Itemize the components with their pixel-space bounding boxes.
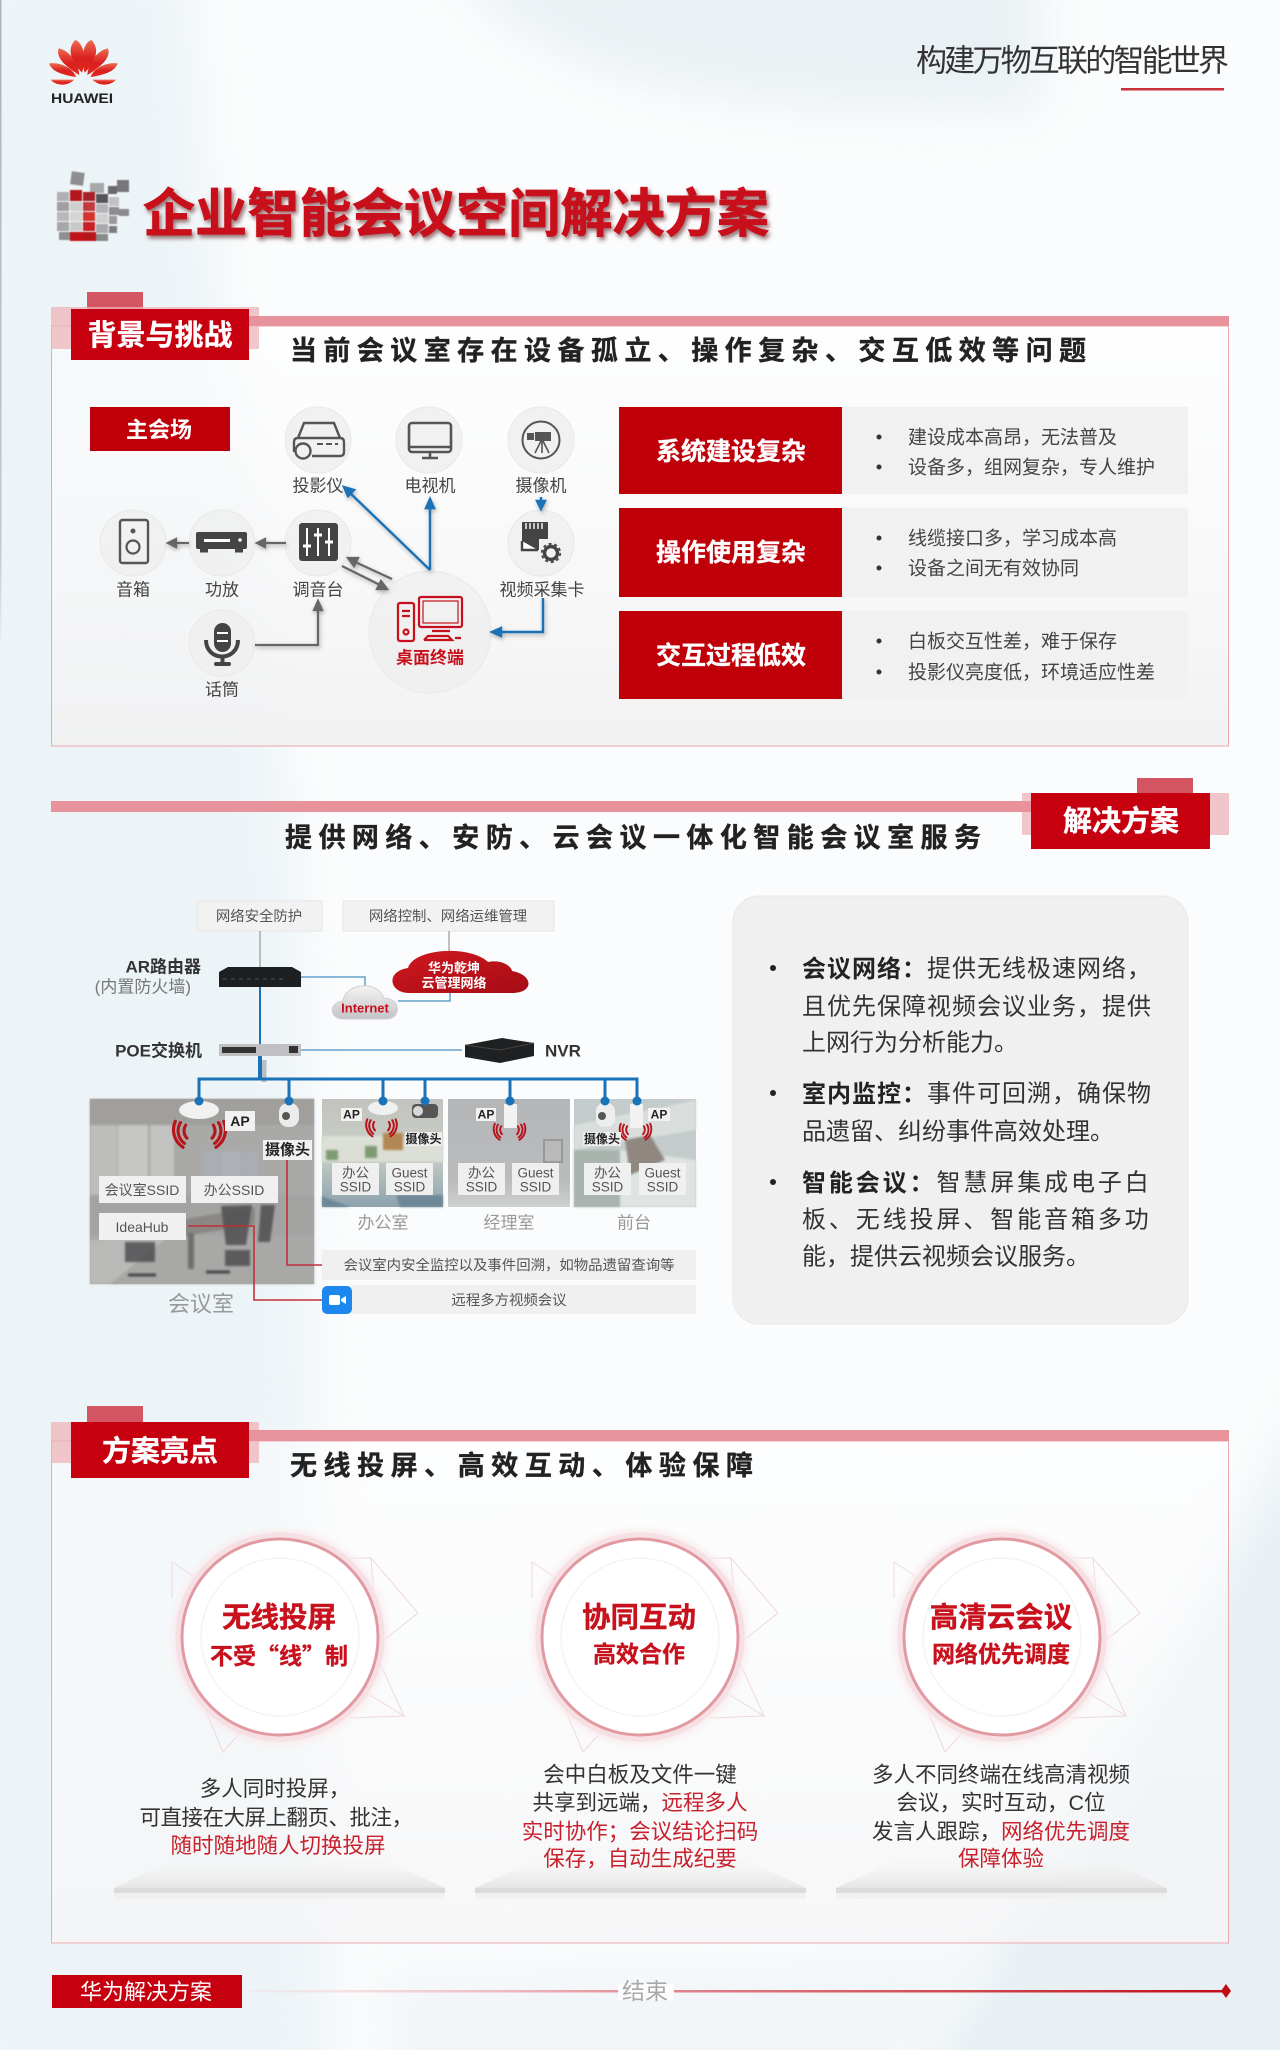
photo: manager office: SSID	[466, 1180, 498, 1194]
photo: office: 办公	[342, 1166, 369, 1180]
cloud: Huawei Qiankun: 华为乾坤	[428, 960, 480, 976]
panel: solution text: 且优先保障视频会议业务，提供	[802, 994, 1152, 1020]
photo: front desk: AP	[651, 1108, 667, 1122]
top labels	[197, 901, 554, 931]
row: low interaction efficiency: 交互过程低效	[656, 642, 806, 670]
logo: Huawei: HUAWEI	[51, 90, 113, 106]
row: system build complexity: 建设成本高昂，无法普及	[908, 426, 1117, 448]
title: 企业智能会议空间解决方案	[143, 186, 769, 244]
strip: monitoring note: 会议室内安全监控以及事件回溯，如物品遗留查询等	[344, 1256, 674, 1274]
icon: speaker	[120, 520, 148, 563]
photo: front desk: Guest	[644, 1166, 681, 1180]
end line: 结束	[622, 1978, 668, 2004]
feature: wireless projection	[114, 1524, 445, 1899]
POE switch: POE交换机	[115, 1040, 202, 1060]
section header: solution: 解决方案	[1063, 805, 1179, 838]
tags: SSID: IdeaHub	[116, 1219, 169, 1235]
photo: manager office: SSID	[520, 1180, 552, 1194]
strip: monitoring note	[322, 1250, 696, 1280]
feature: wireless projection: 多人同时投屏，	[200, 1777, 350, 1801]
NVR: NVR	[545, 1042, 581, 1060]
feature: collaboration: 共享到远端，远程多人	[532, 1791, 748, 1815]
connecting lines	[199, 931, 637, 1101]
red connector lines	[188, 1160, 322, 1300]
photo: manager office: Guest	[517, 1166, 554, 1180]
section header: highlights	[51, 1406, 1229, 1478]
feature: HD cloud meeting: 发言人跟踪，网络优先调度	[872, 1820, 1130, 1844]
tags: SSID: 办公SSID	[204, 1182, 264, 1198]
room labels: 办公室	[358, 1214, 408, 1232]
device labels: 电视机	[404, 476, 456, 496]
panel: solution text	[733, 896, 1188, 1324]
feature: collaboration: 协同互动	[582, 1602, 696, 1634]
feature: collaboration: 高效合作	[593, 1641, 685, 1667]
footer badge: 华为解决方案	[80, 1980, 212, 2004]
logo: Huawei	[49, 40, 118, 106]
tag: camera: 摄像头	[265, 1140, 310, 1158]
arrows: blue signal flow	[344, 487, 545, 636]
feature: collaboration: 保存，自动生成纪要	[543, 1847, 737, 1871]
row: low interaction efficiency: 投影仪亮度低，环境适应性差	[908, 662, 1155, 684]
panel: solution text: 品遗留、纠纷事件高效处理。	[802, 1118, 1114, 1146]
photo: manager office: 办公	[468, 1166, 495, 1180]
photo: manager office: AP	[478, 1108, 494, 1122]
row: operation complexity: 操作使用复杂	[656, 539, 806, 567]
subtitle: 无线投屏、高效互动、体验保障	[290, 1451, 753, 1481]
AP device	[179, 1101, 219, 1119]
panel: solution text: 会议网络：提供无线极速网络，	[802, 954, 1152, 982]
internet cloud	[332, 986, 397, 1019]
section header: solution	[51, 778, 1229, 849]
tags: SSID	[99, 1176, 278, 1240]
photo: front desk: SSID	[647, 1180, 679, 1194]
top labels: 网络控制、网络运维管理	[369, 908, 527, 925]
icon: video meeting	[322, 1286, 352, 1314]
icon: microphone	[206, 623, 238, 666]
footer	[52, 1975, 1231, 2008]
device labels	[116, 476, 584, 700]
feature: wireless projection: 随时随地随人切换投屏	[170, 1834, 386, 1858]
icon: tv	[409, 423, 451, 458]
photo: front desk	[574, 1096, 696, 1207]
feature: HD cloud meeting	[836, 1524, 1167, 1899]
row: operation complexity: 线缆接口多，学习成本高	[908, 528, 1117, 550]
feature: HD cloud meeting: 会议，实时互动，C位	[896, 1791, 1106, 1815]
panel: solution text: 上网行为分析能力。	[802, 1030, 1018, 1056]
footer badge	[52, 1975, 242, 2008]
camera	[279, 1103, 299, 1127]
room labels	[168, 1214, 651, 1316]
strip: remote video meeting: 远程多方视频会议	[451, 1292, 567, 1309]
panel: solution text: 能，提供云视频会议服务。	[802, 1244, 1090, 1270]
router: (内置防火墙)	[95, 978, 191, 996]
device labels: 视频采集卡	[500, 580, 584, 600]
row: system build complexity	[619, 407, 1188, 494]
room labels: 会议室	[168, 1292, 234, 1316]
feature: HD cloud meeting: 多人不同终端在线高清视频	[872, 1763, 1130, 1787]
icon: projector	[294, 423, 344, 458]
tag: AP: AP	[230, 1113, 250, 1129]
photo: office: 摄像头	[405, 1131, 442, 1146]
feature: HD cloud meeting: 保障体验	[958, 1847, 1044, 1871]
feature: HD cloud meeting: 网络优先调度	[932, 1641, 1070, 1667]
icon: desktop terminal	[398, 597, 462, 641]
photo: conference room	[90, 1096, 314, 1284]
panel: solution text: 室内监控：事件可回溯，确保物	[802, 1080, 1152, 1108]
icon: cube cluster	[57, 171, 129, 241]
device labels: 功放	[205, 580, 239, 600]
feature: wireless projection: 可直接在大屏上翻页、批注，	[139, 1806, 413, 1830]
section header: background and challenges	[51, 292, 1229, 360]
tags: SSID: 会议室SSID	[105, 1182, 179, 1198]
NVR	[465, 1038, 581, 1063]
tagline: 构建万物互联的智能世界	[916, 44, 1229, 78]
icon: mixer	[299, 523, 338, 561]
panel: highlights	[51, 1406, 1229, 1943]
device labels: 投影仪	[292, 476, 344, 496]
row: operation complexity: 设备之间无有效协同	[908, 558, 1079, 580]
POE switch	[115, 1040, 301, 1060]
panel: background and challenges	[51, 292, 1229, 746]
router: AR路由器	[125, 958, 201, 976]
icon: capture card	[522, 522, 560, 562]
router	[95, 958, 301, 996]
device circles	[100, 407, 574, 693]
icon: amplifier	[196, 532, 247, 552]
subtitle: 当前会议室存在设备孤立、操作复杂、交互低效等问题	[290, 336, 1086, 366]
photo: front desk: 摄像头	[584, 1131, 620, 1146]
feature: collaboration: 实时协作；会议结论扫码	[522, 1820, 758, 1844]
cloud: Huawei Qiankun	[392, 951, 528, 993]
photo: office	[322, 1096, 443, 1207]
row: low interaction efficiency: 白板交互性差，难于保存	[908, 630, 1117, 652]
icon: video camera	[522, 422, 560, 458]
section header: highlights: 方案亮点	[102, 1435, 218, 1468]
end line	[248, 1978, 1231, 2004]
room labels: 经理室	[484, 1214, 534, 1232]
row: system build complexity: 系统建设复杂	[656, 438, 806, 466]
device labels: 摄像机	[516, 476, 566, 496]
problem list	[619, 407, 1188, 699]
feature: wireless projection: 不受“线”制	[210, 1637, 348, 1671]
internet cloud: Internet	[341, 1000, 390, 1016]
panel frame	[52, 326, 1228, 746]
tag: AP	[225, 1111, 255, 1131]
device labels: 调音台	[292, 580, 344, 600]
photo: office: SSID	[340, 1180, 372, 1194]
panel: solution text: 智能会议：智慧屏集成电子白	[802, 1170, 1152, 1196]
row: system build complexity: 设备多，组网复杂，专人维护	[908, 456, 1155, 478]
cloud: Huawei Qiankun: 云管理网络	[421, 976, 487, 990]
photo: office: SSID	[394, 1180, 426, 1194]
photo: office: AP	[343, 1108, 360, 1122]
row: operation complexity	[619, 508, 1188, 597]
panel: solution text: 板、无线投屏、智能音箱多功	[802, 1206, 1152, 1234]
feature: collaboration: 会中白板及文件一键	[543, 1763, 737, 1787]
device labels: 话筒	[205, 680, 239, 700]
feature: wireless projection: 无线投屏	[222, 1602, 336, 1634]
strip: remote video meeting	[352, 1285, 696, 1314]
subtitle: solution: 提供网络、安防、云会议一体化智能会议室服务	[285, 823, 981, 853]
photo: office: Guest	[391, 1166, 428, 1180]
feature: collaboration	[475, 1524, 806, 1899]
badge: main venue: 主会场	[126, 418, 192, 442]
feature: HD cloud meeting: 高清云会议	[930, 1602, 1073, 1634]
network topology diagram	[90, 901, 696, 1316]
device network diagram	[100, 407, 584, 700]
arrows: gray audio flow	[168, 539, 392, 645]
photo: front desk: 办公	[594, 1166, 622, 1180]
photo: manager office	[448, 1096, 570, 1207]
device labels: 桌面终端	[396, 648, 464, 668]
section header: background and challenges: 背景与挑战	[87, 319, 233, 352]
photo: front desk: SSID	[592, 1180, 624, 1194]
badge: main venue	[90, 407, 230, 451]
room labels: 前台	[617, 1214, 651, 1232]
top labels: 网络安全防护	[216, 907, 302, 925]
row: low interaction efficiency	[619, 611, 1188, 699]
panel frame	[52, 1441, 1228, 1943]
device labels: 音箱	[116, 580, 150, 600]
